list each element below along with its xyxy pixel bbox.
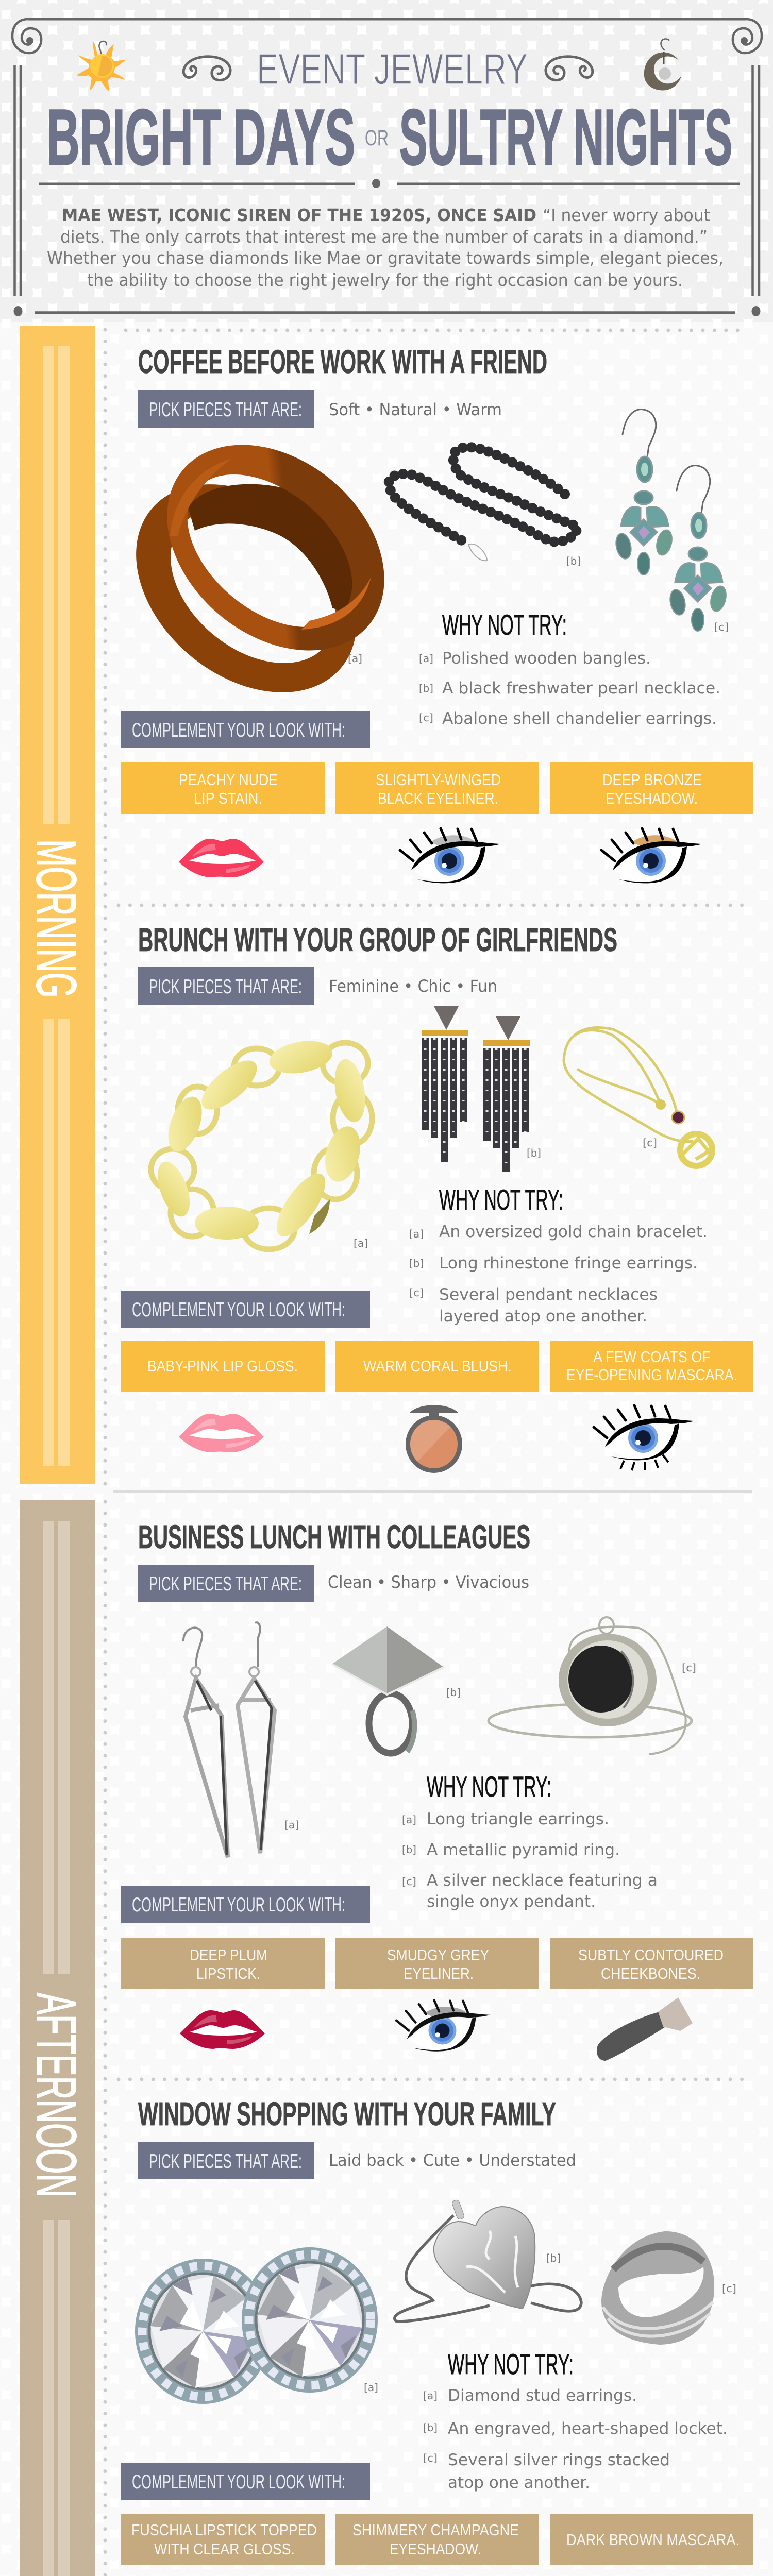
label b: [b] — [527, 1147, 541, 1159]
box: blush: WARM CORAL BLUSH. — [363, 1357, 512, 1375]
box: plum lipstick — [121, 1938, 325, 1989]
qualities: Clean • Sharp • Vivacious — [328, 1572, 529, 1592]
panel: brunch — [121, 921, 753, 1473]
jewelry: triangle earrings — [183, 1622, 299, 1857]
box: mascara — [550, 1341, 753, 1392]
why not try: [c] — [402, 1875, 416, 1888]
why not try: A black freshwater pearl necklace. — [442, 679, 720, 698]
box: grey eyeliner: SMUDGY GREY — [387, 1946, 489, 1964]
label c: [c] — [722, 2282, 736, 2295]
why not try: Long rhinestone fringe earrings. — [439, 1254, 698, 1273]
complement bar — [121, 711, 370, 748]
box: fuschia lipstick: WITH CLEAR GLOSS. — [154, 2540, 295, 2558]
label a: [a] — [284, 1819, 299, 1831]
why not try: An engraved, heart-shaped locket. — [448, 2419, 728, 2438]
pick pieces bar: PICK PIECES THAT ARE: — [149, 2150, 302, 2173]
icon: coral blush — [406, 1405, 462, 1473]
box: eyeliner: SLIGHTLY-WINGED — [376, 771, 501, 789]
label b: [b] — [546, 2252, 561, 2264]
icon: bronze eye — [601, 828, 702, 883]
complement bar — [121, 1886, 370, 1923]
box: brown mascara: DARK BROWN MASCARA. — [566, 2531, 740, 2549]
ornate frame — [12, 19, 762, 316]
pick pieces bar: PICK PIECES THAT ARE: — [149, 399, 302, 421]
why not try: WHY NOT TRY: — [448, 2348, 574, 2380]
label a: [a] — [348, 652, 362, 665]
box: eyeshadow: EYESHADOW. — [606, 789, 698, 807]
icon: crescent moon — [644, 39, 681, 90]
jewelry: black pearl necklace — [389, 447, 581, 567]
jewelry: gold chain bracelet — [151, 1037, 372, 1249]
box: eyeliner — [335, 762, 539, 814]
box: champagne eyeshadow: SHIMMERY CHAMPAGNE — [352, 2521, 519, 2539]
box: lip stain — [121, 762, 325, 814]
why not try: Polished wooden bangles. — [442, 649, 651, 668]
box: grey eyeliner — [335, 1938, 539, 1989]
why not try: [b] — [402, 1843, 416, 1856]
label c: [c] — [714, 621, 729, 633]
panel: window shopping — [121, 2095, 753, 2576]
icon: winged eye — [400, 828, 501, 883]
why not try: Diamond stud earrings. — [448, 2386, 637, 2405]
title: COFFEE BEFORE WORK WITH A FRIEND — [138, 343, 547, 380]
icon: pink lips — [179, 1414, 264, 1452]
pick pieces bar — [138, 390, 314, 428]
intro paragraph: the ability to choose the right jewelry for the right occasion can be yours. — [87, 270, 683, 290]
pick pieces bar — [138, 967, 314, 1005]
why not try: WHY NOT TRY: — [427, 1770, 551, 1803]
why not try: [c] — [419, 711, 433, 724]
box: cheekbones: CHEEKBONES. — [601, 1964, 700, 1982]
divider — [39, 179, 740, 188]
icon: mascara eye — [594, 1405, 695, 1470]
why not try: [a] — [409, 1228, 424, 1240]
intro paragraph: Whether you chase diamonds like Mae or gravitate towards simple, elegant pieces, — [47, 248, 724, 268]
icon: swirl left — [183, 57, 230, 80]
box: champagne eyeshadow — [335, 2514, 539, 2565]
why not try: Several pendant necklaces — [439, 1285, 658, 1304]
why not try: A metallic pyramid ring. — [427, 1841, 620, 1859]
label a: [a] — [364, 2381, 378, 2394]
intro paragraph: MAE WEST, ICONIC SIREN OF THE 1920S, ONCE SAID — [62, 205, 536, 225]
box: cheekbones — [550, 1938, 753, 1989]
jewelry: pyramid ring — [332, 1626, 461, 1753]
panel: business lunch — [121, 1518, 753, 2061]
why not try: Several silver rings stacked — [448, 2451, 670, 2469]
pick pieces bar: PICK PIECES THAT ARE: — [149, 976, 302, 998]
box: lip gloss: BABY-PINK LIP GLOSS. — [147, 1357, 298, 1375]
jewelry: heart locket — [395, 2199, 581, 2321]
jewelry: diamond studs — [135, 2247, 378, 2404]
why not try: [b] — [409, 1257, 424, 1269]
why not try: An oversized gold chain bracelet. — [439, 1223, 708, 1241]
label c: [c] — [682, 1662, 696, 1674]
icon: peach lips — [179, 839, 264, 877]
why not try: A silver necklace featuring a — [427, 1871, 658, 1890]
jewelry: rhinestone fringe earrings — [422, 1006, 541, 1172]
pick pieces bar — [138, 2142, 314, 2179]
box: eyeliner: BLACK EYELINER. — [378, 789, 498, 807]
intro paragraph: “I never worry about — [543, 205, 710, 225]
qualities: Soft • Natural • Warm — [329, 400, 502, 419]
box: grey eyeliner: EYELINER. — [404, 1964, 474, 1982]
sidebar: afternoon: AFTERNOON — [25, 1993, 88, 2197]
qualities: Laid back • Cute • Understated — [329, 2150, 576, 2170]
why not try: WHY NOT TRY: — [439, 1183, 563, 1216]
box: blush — [335, 1341, 539, 1392]
why not try: single onyx pendant. — [427, 1892, 596, 1911]
panel: header — [12, 19, 762, 316]
box: plum lipstick: DEEP PLUM — [190, 1946, 267, 1964]
box: lip gloss — [121, 1341, 325, 1392]
jewelry: abalone earrings — [614, 410, 729, 633]
box: eyeshadow — [550, 762, 753, 814]
icon: sun — [76, 41, 126, 92]
why not try: [c] — [409, 1286, 424, 1299]
heading: event jewelry: EVENT JEWELRY — [257, 45, 528, 93]
box: fuschia lipstick — [121, 2514, 325, 2565]
heading: or: OR — [365, 126, 389, 150]
box: fuschia lipstick: FUSCHIA LIPSTICK TOPPED — [131, 2521, 317, 2539]
why not try: [b] — [419, 682, 433, 694]
jewelry: wooden bangles — [95, 403, 425, 735]
pick pieces bar — [138, 1565, 314, 1602]
why not try: [a] — [423, 2389, 438, 2402]
complement bar: COMPLEMENT YOUR LOOK WITH: — [132, 1299, 345, 1321]
why not try: atop one another. — [448, 2473, 590, 2492]
box: eyeshadow: DEEP BRONZE — [602, 771, 702, 789]
why not try: [a] — [419, 652, 433, 665]
why not try: [a] — [402, 1814, 416, 1826]
sidebar: afternoon — [20, 1500, 95, 2576]
why not try — [409, 1183, 708, 1326]
title: BUSINESS LUNCH WITH COLLEAGUES — [138, 1518, 530, 1555]
complement bar — [121, 2463, 370, 2500]
intro paragraph: diets. The only carrots that interest me are the number of carats in a diamond.” — [60, 227, 708, 247]
intro paragraph — [47, 205, 724, 290]
why not try: Long triangle earrings. — [427, 1810, 609, 1828]
jewelry: stacked silver rings — [601, 2231, 736, 2345]
sidebar: morning — [20, 326, 95, 1484]
box: champagne eyeshadow: EYESHADOW. — [390, 2540, 481, 2558]
box: mascara: A FEW COATS OF — [593, 1348, 711, 1366]
label a: [a] — [354, 1237, 368, 1249]
box: mascara: EYE-OPENING MASCARA. — [566, 1366, 737, 1384]
sidebar: morning: MORNING — [25, 839, 88, 998]
complement bar: COMPLEMENT YOUR LOOK WITH: — [132, 719, 345, 741]
why not try — [423, 2348, 728, 2492]
why not try — [419, 608, 720, 728]
icon: plum lips — [180, 2010, 265, 2049]
why not try: WHY NOT TRY: — [442, 608, 567, 641]
why not try: layered atop one another. — [439, 1307, 647, 1326]
why not try — [402, 1770, 658, 1911]
jewelry: onyx necklace — [489, 1617, 696, 1754]
label c: [c] — [643, 1137, 657, 1149]
box: plum lipstick: LIPSTICK. — [196, 1964, 260, 1982]
box: lip stain: PEACHY NUDE — [179, 771, 278, 789]
icon: swirl right — [546, 57, 593, 80]
label b: [b] — [446, 1686, 461, 1699]
complement bar — [121, 1291, 370, 1328]
box: brown mascara — [550, 2514, 753, 2565]
icon: smudgy eye — [396, 2001, 490, 2052]
box: cheekbones: SUBTLY CONTOURED — [578, 1946, 724, 1964]
why not try: Abalone shell chandelier earrings. — [442, 709, 717, 728]
pick pieces bar: PICK PIECES THAT ARE: — [149, 1573, 302, 1595]
qualities: Feminine • Chic • Fun — [329, 976, 497, 996]
why not try: [b] — [423, 2421, 438, 2434]
box: lip stain: LIP STAIN. — [194, 789, 262, 807]
label b: [b] — [566, 555, 581, 567]
complement bar: COMPLEMENT YOUR LOOK WITH: — [132, 1894, 345, 1916]
title: WINDOW SHOPPING WITH YOUR FAMILY — [138, 2095, 556, 2132]
complement bar: COMPLEMENT YOUR LOOK WITH: — [132, 2471, 345, 2493]
icon: contour brush — [597, 1997, 693, 2061]
jewelry: layered pendant necklaces — [564, 1028, 712, 1166]
panel: coffee before work — [95, 343, 753, 883]
why not try: [c] — [423, 2452, 438, 2464]
heading: bright days: BRIGHT DAYS — [47, 93, 355, 181]
